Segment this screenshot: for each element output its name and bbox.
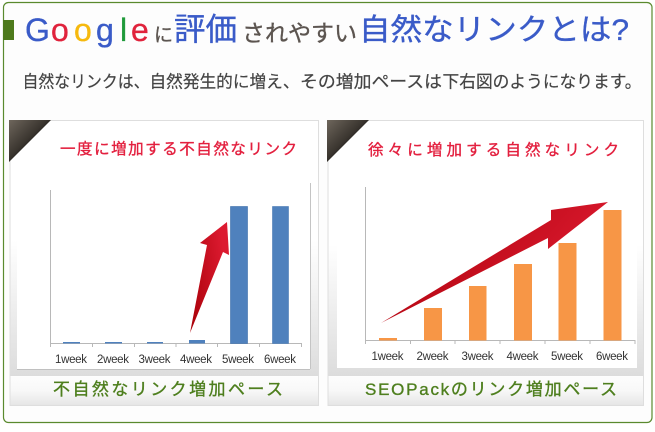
title: l [120, 12, 127, 48]
panel heading: 徐々に増加する自然なリンク [368, 141, 619, 159]
panel: SEOPack link growth [327, 120, 644, 406]
title: されやすい [242, 20, 357, 46]
title: 評価 [174, 11, 237, 47]
corner triangle [327, 120, 369, 162]
corner triangle [9, 120, 51, 162]
panel shading [328, 245, 643, 377]
heading marker: green square [3, 20, 14, 40]
title: に [154, 25, 173, 46]
bar chart [365, 187, 635, 363]
intro text: 自然なリンクは、 [22, 72, 150, 92]
caption band [328, 376, 643, 405]
intro text: その増加ペースは [300, 72, 442, 92]
bar chart: 6week [264, 354, 296, 366]
chart background [337, 186, 637, 368]
intro text [22, 72, 642, 92]
title: 自然なリンクとは? [359, 14, 629, 47]
title [25, 11, 629, 48]
bar chart: 5week [551, 351, 583, 363]
bar chart: 2week [416, 351, 449, 363]
caption band [10, 376, 318, 405]
panel caption: SEOPackのリンク増加ペース [365, 380, 617, 399]
title: g [96, 12, 114, 48]
bar chart: 3week [462, 351, 494, 363]
chart background [17, 183, 310, 369]
bar chart: 6week [596, 351, 628, 363]
panel caption: 不自然なリンク増加ペース [53, 380, 283, 399]
arrow: gradual rise [381, 202, 608, 323]
panel: unnatural link growth [9, 120, 318, 406]
bar chart: 4week [506, 351, 539, 363]
intro text: 下右図のようになります。 [442, 72, 642, 92]
panel shading [10, 240, 318, 377]
bar chart [17, 183, 310, 370]
panel heading: 一度に増加する不自然なリンク [60, 140, 297, 158]
bar chart: 1week [55, 354, 87, 366]
arrow: sudden rise [190, 222, 229, 333]
bar chart: 1week [372, 351, 404, 363]
bar chart: 2week [97, 354, 129, 366]
bar chart: 4week [180, 354, 212, 366]
bar chart: 3week [138, 354, 171, 366]
bar chart: 5week [222, 354, 254, 366]
title: G [25, 12, 50, 48]
intro text: 自然発生的に増え、 [150, 72, 300, 92]
title: o [74, 12, 92, 48]
title: o [51, 12, 69, 48]
title: e [131, 12, 149, 48]
